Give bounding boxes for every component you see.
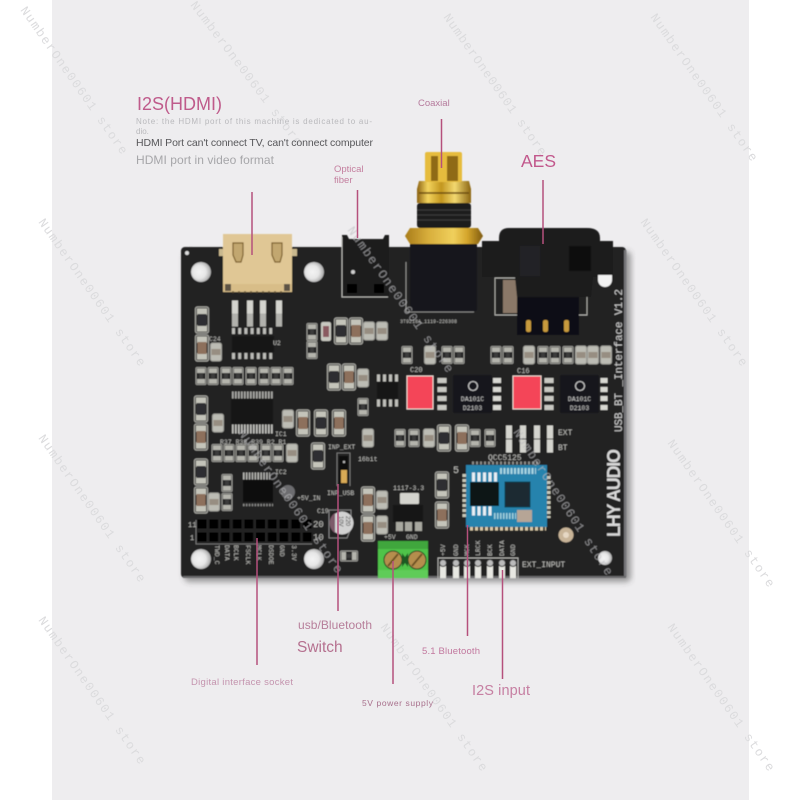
board silk legends: IC2 bbox=[275, 469, 287, 476]
label: optical fiber: Optical bbox=[334, 164, 364, 175]
leader line: HDMI bbox=[251, 192, 253, 255]
label: I2S input: I2S input bbox=[472, 683, 530, 699]
watermarks: NumberOne00601 store bbox=[647, 11, 760, 164]
hdmi port bbox=[219, 234, 297, 292]
EXT_INPUT header: GND bbox=[510, 544, 517, 556]
board silk legends: EXT bbox=[558, 429, 573, 438]
u.fl antenna socket bbox=[558, 528, 574, 542]
watermarks: NumberOne00601 store bbox=[440, 11, 549, 159]
warning text: HDMI Port can't connect TV, can't connect computer bbox=[136, 137, 374, 149]
label: coaxial: Coaxial bbox=[418, 98, 450, 109]
input selector jumper bbox=[327, 444, 378, 497]
board silk legends: IC1 bbox=[275, 431, 287, 438]
label: usb bluetooth: usb/Bluetooth bbox=[298, 618, 372, 632]
surface mount parts: centre bbox=[282, 318, 495, 541]
note text line 2: dio. bbox=[136, 127, 149, 136]
label: digital interface socket: Digital interface socket bbox=[191, 677, 293, 688]
board silk legends: BT bbox=[558, 444, 568, 453]
EXT_INPUT header: MCK bbox=[464, 544, 471, 556]
electrolytic capacitor: 220 bbox=[344, 516, 350, 527]
note text line 1: Note: the HDMI port of this machine is dedicated to au- bbox=[136, 117, 372, 126]
header pin silk labels: MCLK bbox=[255, 545, 262, 561]
label: switch: Switch bbox=[297, 639, 343, 656]
surface mount parts: left column bbox=[194, 300, 298, 513]
surface mount parts: top right row bbox=[402, 346, 612, 452]
AES XLR connector bbox=[482, 228, 613, 335]
leader line: 5V power bbox=[392, 561, 394, 684]
header pin silk labels: 20 bbox=[313, 520, 324, 530]
part number: 3T9218A_1119-226308 bbox=[400, 319, 457, 325]
optical fiber socket bbox=[342, 235, 389, 298]
watermarks: NumberOne00601 store bbox=[377, 621, 490, 774]
leader line: i2s input bbox=[502, 570, 504, 679]
DA101C transformers: D2103 bbox=[570, 405, 589, 412]
mounting holes bbox=[185, 251, 612, 569]
header pin silk labels: TWD_C bbox=[213, 545, 220, 565]
EXT_INPUT header: BCK bbox=[487, 544, 494, 556]
watermarks: NumberOne00601 store bbox=[17, 4, 130, 157]
QCC5125 bluetooth module: 5 bbox=[453, 466, 459, 477]
label: 5.1 bluetooth: 5.1 Bluetooth bbox=[422, 646, 480, 657]
leader line: bluetooth bbox=[466, 525, 468, 636]
leader line: coaxial bbox=[440, 119, 442, 168]
electrolytic capacitor bbox=[317, 508, 358, 561]
DA101C transformers: D2103 bbox=[463, 405, 482, 412]
DA101C transformers bbox=[442, 375, 604, 413]
header pin silk labels: 1 bbox=[190, 535, 194, 543]
5V screw terminal: GND bbox=[406, 534, 418, 541]
board silk legends: C20 bbox=[410, 367, 423, 375]
watermarks: NumberOne00601 store bbox=[664, 437, 777, 590]
board silk legends: C24 bbox=[209, 336, 221, 343]
EXT_INPUT header bbox=[438, 540, 565, 578]
header pin silk labels: FSCLK bbox=[244, 545, 251, 565]
QCC5125 bluetooth module bbox=[453, 454, 548, 528]
5V screw terminal bbox=[378, 534, 428, 578]
header pin silk labels: DSDOE bbox=[267, 545, 274, 565]
input selector jumper: 16bit bbox=[358, 456, 378, 463]
label: 5V power supply: 5V power supply bbox=[362, 698, 434, 708]
label: optical fiber: fiber bbox=[334, 175, 352, 186]
leader line: optical bbox=[356, 190, 358, 238]
watermarks: NumberOne00601 store bbox=[35, 614, 148, 767]
board watermarks: NumberOne00601 store bbox=[510, 427, 615, 578]
DA101C transformers: DA101C bbox=[568, 396, 591, 403]
header pin silk labels: 10 bbox=[313, 533, 324, 543]
20 pin digital interface header bbox=[196, 520, 312, 544]
watermarks: NumberOne00601 store bbox=[35, 216, 148, 369]
EXT_INPUT header: GND bbox=[453, 544, 460, 556]
red capacitors bbox=[407, 376, 541, 409]
watermarks: NumberOne00601 store bbox=[35, 432, 148, 585]
board silk legends: U2 bbox=[273, 340, 281, 347]
EXT_INPUT header: DATA bbox=[499, 540, 506, 556]
watermarks: NumberOne00601 store bbox=[664, 621, 777, 774]
watermarks: NumberOne00601 store bbox=[187, 0, 305, 149]
format text: HDMI port in video format bbox=[136, 153, 275, 167]
electrolytic capacitor: C19 bbox=[317, 508, 329, 515]
board watermarks: NumberOne00601 store bbox=[235, 427, 345, 576]
header pin silk labels: 11 bbox=[188, 522, 196, 530]
header pin silk labels: 3.3V bbox=[290, 545, 297, 561]
board watermarks bbox=[235, 224, 615, 578]
header pin silk labels bbox=[188, 495, 324, 565]
leader line: digital interface bbox=[256, 538, 258, 665]
integrated circuit U2 bbox=[232, 331, 274, 356]
board silk legends: LHY AUDIO bbox=[604, 449, 624, 537]
integrated circuit IC2 bbox=[243, 476, 273, 505]
EXT_INPUT header: EXT_INPUT bbox=[522, 561, 565, 570]
leader line: AES bbox=[542, 180, 544, 244]
1117-3.3 regulator: 1117-3.3 bbox=[393, 485, 424, 492]
1117-3.3 regulator bbox=[393, 485, 424, 531]
board silk legends bbox=[209, 289, 626, 537]
header pin silk labels: DATA bbox=[223, 545, 230, 561]
label: AES: AES bbox=[521, 151, 556, 171]
input selector jumper: INP_USB bbox=[327, 490, 354, 497]
header pin silk labels: +5V_IN bbox=[297, 495, 321, 502]
coaxial RCA connector bbox=[400, 152, 483, 325]
pcb board bbox=[181, 152, 631, 582]
board silk legends: USB_BT _Interface V1.2 bbox=[614, 289, 626, 432]
header pin silk labels: BCLK bbox=[232, 545, 239, 561]
DA101C transformers: DA101C bbox=[461, 396, 484, 403]
integrated circuit IC1 bbox=[231, 395, 273, 429]
board silk legends: R37 R38 R39 R2 R1 bbox=[220, 439, 286, 446]
watermarks: NumberOne00601 store bbox=[637, 216, 750, 369]
board watermarks: NumberOne00601 store bbox=[344, 224, 456, 376]
EXT_INPUT header: LRCK bbox=[475, 540, 482, 556]
8 pin IC bbox=[377, 378, 398, 403]
electrolytic capacitor: 10V bbox=[337, 516, 343, 527]
5V screw terminal: +5V bbox=[384, 534, 396, 541]
board silk legends: C16 bbox=[517, 368, 530, 376]
input selector jumper: INP_EXT bbox=[328, 444, 355, 451]
heading: I2S HDMI: I2S(HDMI) bbox=[137, 94, 222, 114]
QCC5125 bluetooth module: QCC5125 bbox=[488, 454, 522, 463]
leader line: usb bluetooth switch bbox=[337, 484, 339, 611]
EXT_INPUT header: +5V bbox=[440, 544, 447, 556]
header pin silk labels: GND bbox=[278, 545, 285, 557]
